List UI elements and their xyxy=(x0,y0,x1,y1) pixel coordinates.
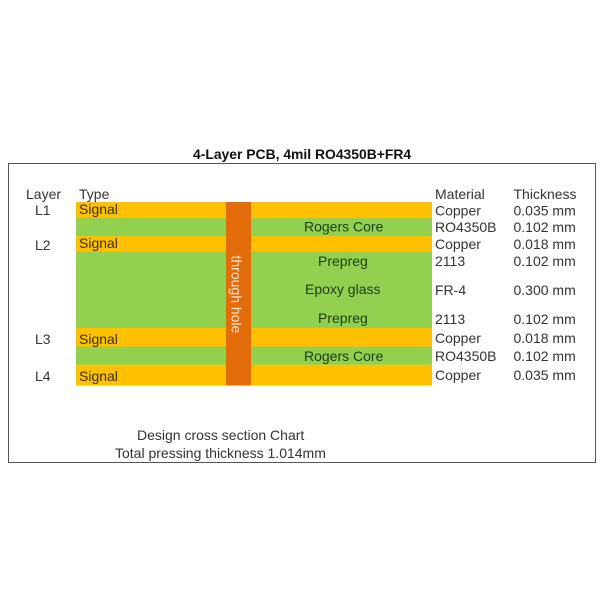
material column: 2113 xyxy=(435,311,465,327)
thickness column: 0.102 mm xyxy=(514,311,576,327)
layer band: L3 copper xyxy=(76,328,432,346)
thickness column: Thickness xyxy=(514,186,577,202)
material column: FR-4 xyxy=(435,282,466,298)
cross section stack xyxy=(76,202,432,386)
layer column: L1 xyxy=(35,202,51,218)
type column: Signal xyxy=(79,201,118,217)
thickness column: 0.300 mm xyxy=(514,282,576,298)
thickness column: 0.035 mm xyxy=(514,202,576,218)
layer names: Epoxy glass xyxy=(305,281,380,297)
layer band: L1 copper xyxy=(76,202,432,218)
material column: Copper xyxy=(435,202,481,218)
through hole: through hole xyxy=(228,256,244,334)
caption: Design cross section Chart xyxy=(137,427,304,443)
thickness column: 0.102 mm xyxy=(514,253,576,269)
thickness column: 0.102 mm xyxy=(514,219,576,235)
material column: 2113 xyxy=(435,253,465,269)
thickness column xyxy=(514,186,577,383)
layer column: L3 xyxy=(35,331,51,347)
type column: Signal xyxy=(79,235,118,251)
layer names: Prepreg xyxy=(318,310,368,326)
title: 4-Layer PCB, 4mil RO4350B+FR4 xyxy=(193,146,411,162)
type column xyxy=(79,186,118,384)
material column: Copper xyxy=(435,330,481,346)
material column: Copper xyxy=(435,367,481,383)
layer names: Rogers Core xyxy=(304,348,384,364)
layer band: Rogers core xyxy=(76,218,432,236)
layer band: L4 copper xyxy=(76,364,432,386)
material column: RO4350B xyxy=(435,348,496,364)
layer band: prepreg and epoxy glass xyxy=(76,252,432,328)
layer band: L2 copper xyxy=(76,236,432,252)
material column: RO4350B xyxy=(435,219,496,235)
material column xyxy=(435,186,496,383)
caption: Total pressing thickness 1.014mm xyxy=(115,445,326,461)
layer column xyxy=(26,186,61,384)
caption xyxy=(115,427,326,461)
layer column: L4 xyxy=(35,368,51,384)
material column: Copper xyxy=(435,236,481,252)
type column: Type xyxy=(79,186,110,202)
layer names: Prepreg xyxy=(318,253,368,269)
thickness column: 0.018 mm xyxy=(514,330,576,346)
layer column: L2 xyxy=(35,237,51,253)
thickness column: 0.035 mm xyxy=(514,367,576,383)
thickness column: 0.102 mm xyxy=(514,348,576,364)
layer names: Rogers Core xyxy=(304,218,384,234)
layer names xyxy=(304,218,384,364)
through hole xyxy=(226,202,251,386)
material column: Material xyxy=(435,186,485,202)
layer band: Rogers core xyxy=(76,346,432,364)
thickness column: 0.018 mm xyxy=(514,236,576,252)
layer column: Layer xyxy=(26,186,61,202)
type column: Signal xyxy=(79,331,118,347)
type column: Signal xyxy=(79,368,118,384)
chart frame xyxy=(8,164,596,462)
